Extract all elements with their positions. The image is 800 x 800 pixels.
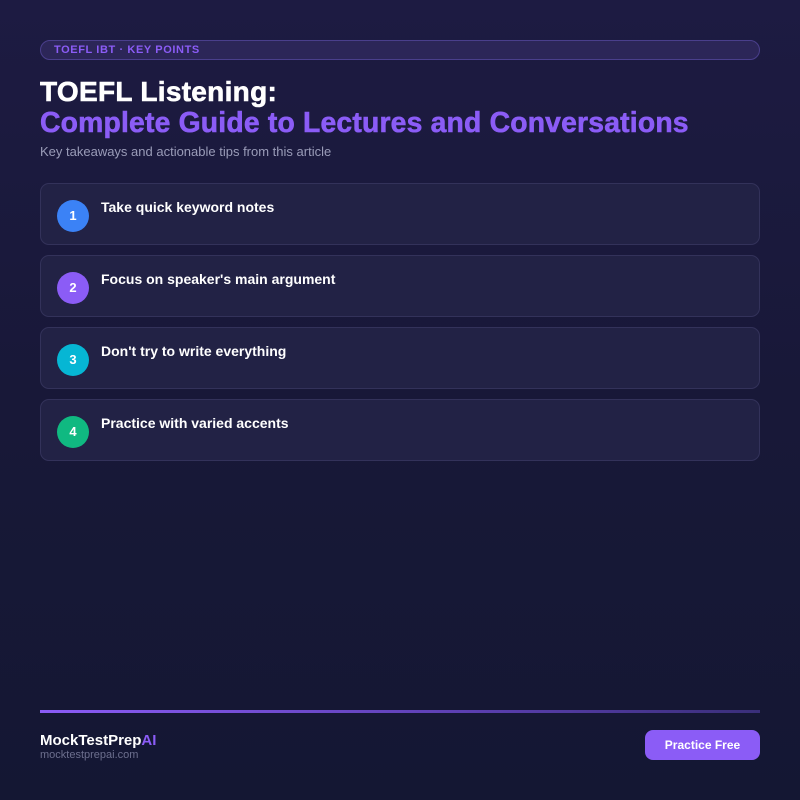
brand: MockTestPrepAI bbox=[40, 732, 156, 749]
subtitle: Key takeaways and actionable tips from this article bbox=[40, 144, 331, 159]
title accent: Complete Guide to Lectures and Conversations bbox=[40, 106, 689, 138]
card 4 bbox=[40, 399, 760, 461]
card 1 bbox=[40, 183, 760, 245]
category tag bbox=[40, 40, 760, 60]
card 2: Focus on speaker's main argument bbox=[101, 271, 335, 287]
title: TOEFL Listening: bbox=[40, 76, 277, 107]
card 2: 2 bbox=[69, 280, 77, 295]
button bbox=[645, 730, 760, 760]
card 2 bbox=[40, 255, 760, 317]
category tag: TOEFL IBT · KEY POINTS bbox=[54, 44, 200, 56]
card 3 bbox=[40, 327, 760, 389]
card 1: 1 bbox=[69, 208, 77, 223]
card 1: Take quick keyword notes bbox=[101, 199, 274, 215]
card 4: Practice with varied accents bbox=[101, 415, 289, 431]
card 3: 3 bbox=[69, 352, 77, 367]
url: mocktestprepai.com bbox=[40, 749, 138, 761]
card 3: Don't try to write everything bbox=[101, 343, 286, 359]
button: Practice Free bbox=[665, 738, 740, 752]
card 4: 4 bbox=[69, 424, 77, 439]
